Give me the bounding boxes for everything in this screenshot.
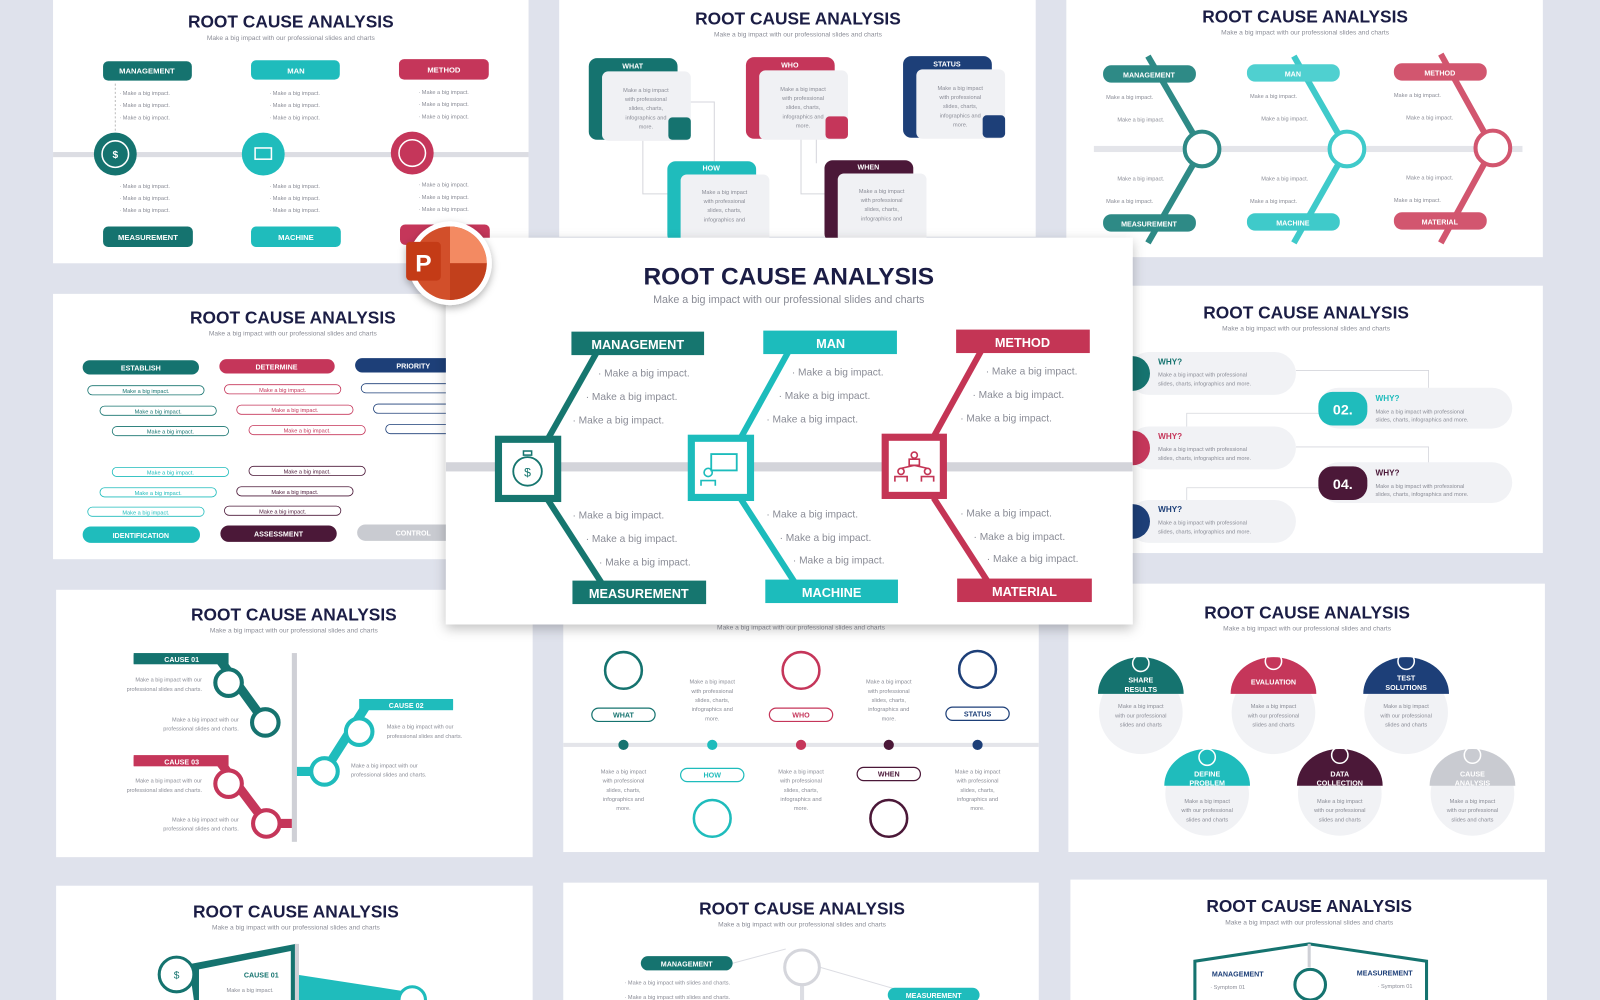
branch: management / measurement: · Make a big impact. <box>586 534 677 545</box>
slide: row4 col3 <box>1070 880 1547 1000</box>
slide: row1 col3 chevrons: Make a big impact. <box>1106 95 1154 101</box>
slide: row3 col3 process domes: slides and charts <box>1319 817 1361 823</box>
main title: ROOT CAUSE ANALYSIS <box>644 264 934 291</box>
slide: row2 col1 establish/determine: Make a big impact. <box>271 408 319 414</box>
slide: row3 col3 process domes: ROOT CAUSE ANALYSIS <box>1204 602 1410 622</box>
branch: man / machine: · Make a big impact. <box>766 509 858 520</box>
slide: row2 col1 establish/determine: Make a big impact. <box>135 409 182 415</box>
slide: row1 col3 chevrons: MANAGEMENT <box>1123 72 1176 80</box>
column: man: · Make a big impact. <box>269 196 320 202</box>
slide: row2 col1 establish/determine <box>53 294 529 559</box>
branch: management / measurement: · Make a big impact. <box>598 369 690 380</box>
column: method: · Make a big impact. <box>418 183 469 189</box>
card: how: slides, charts, <box>707 208 742 214</box>
slide: row2 col3 why: WHY? <box>1158 432 1182 441</box>
slide: row2 col1 establish/determine: Make a big impact with our professional slides and charts <box>209 331 377 338</box>
card: what: Make a big impact <box>623 88 669 94</box>
main subtitle: Make a big impact with our professional slides and charts <box>653 294 924 306</box>
slide: row1 col3 chevrons: Make a big impact. <box>1117 117 1165 123</box>
branch: management / measurement: · Make a big impact. <box>572 510 664 521</box>
slide: row4 col1 <box>56 886 533 1000</box>
card: how: HOW <box>703 164 720 172</box>
slide: row3 col3 process domes: with our professional <box>1313 808 1366 814</box>
slide: row3 col2 what/how timeline: infographics and <box>780 797 822 803</box>
slide: row3 col3 process domes: slides and charts <box>1252 723 1295 729</box>
slide: row2 col3 why: 02. <box>1333 402 1353 418</box>
column: management: · Make a big impact. <box>119 103 170 109</box>
card: what: slides, charts, <box>629 106 664 112</box>
slide: row4 col2: Make a big impact with our professional slides and charts <box>718 922 887 929</box>
column: management: · Make a big impact. <box>119 208 170 214</box>
slide: row1 col3 chevrons: Make a big impact. <box>1261 177 1309 183</box>
slide: row3 col3 process domes <box>1068 584 1545 852</box>
slide: row3 col1 causes staircase: Make a big impact with our <box>135 779 202 785</box>
slide: row2 col1 establish/determine: DETERMINE <box>256 363 298 371</box>
slide: row4 col2: · Make a big impact with slides and charts. <box>624 981 731 987</box>
card: status: with professional <box>938 95 981 101</box>
branch: method / material: · Make a big impact. <box>960 413 1052 424</box>
slide: row3 col1 causes staircase: professional slides and charts. <box>387 734 463 740</box>
slide: row3 col1 causes staircase: professional slides and charts. <box>351 773 427 779</box>
slide: row3 col1 causes staircase: professional slides and charts. <box>163 827 239 833</box>
slide: row1 col3 chevrons: METHOD <box>1424 70 1455 78</box>
card: who: with professional <box>781 96 824 102</box>
slide: row3 col2 what/how timeline: Make a big impact <box>601 769 647 775</box>
slide: row3 col3 process domes: with our professional <box>1247 713 1299 719</box>
slide: row2 col1 establish/determine: Make a big impact. <box>122 510 170 516</box>
card: when: Make a big impact <box>859 189 905 195</box>
slide: row3 col1 causes staircase: Make a big impact with our professional slides and charts <box>210 628 379 635</box>
slide: row2 col1 establish/determine: ASSESSMENT <box>254 531 304 539</box>
card: who <box>746 57 848 140</box>
branch: man / machine: · Make a big impact. <box>793 555 885 566</box>
branch: man / machine <box>688 331 898 603</box>
card: how: Make a big impact <box>702 190 748 196</box>
slide: row3 col3 process domes: TEST <box>1397 675 1416 683</box>
slide: row2 col3 why: Make a big impact with professional <box>1376 484 1464 490</box>
slide: row3 col3 process domes: Make a big impact <box>1118 704 1164 710</box>
slide: row1 col2 what/who cards: ROOT CAUSE ANALYSIS <box>695 8 901 28</box>
slide: row2 col1 establish/determine: Make a big impact. <box>147 430 194 436</box>
slide: row1 col3 chevrons: Make a big impact. <box>1117 177 1165 183</box>
slide: row3 col3 process domes: with our professional <box>1114 713 1167 719</box>
card: what: more. <box>639 125 654 131</box>
branch: man / machine: · Make a big impact. <box>780 533 871 544</box>
slide: row3 col3 process domes: ANALYSIS <box>1455 780 1490 788</box>
column: method: · Make a big impact. <box>418 207 469 213</box>
slide: row3 col2 what/how timeline: Make a big impact with our professional slides and charts <box>717 625 886 632</box>
branch: method / material <box>882 330 1092 602</box>
slide: row4 col2: MEASUREMENT <box>906 992 962 1000</box>
slide: row3 col2 what/how timeline: slides, charts, <box>872 698 906 704</box>
slide: row3 col2 what/how timeline: more. <box>616 806 631 812</box>
slide: row1 col3 chevrons: Make a big impact with our professional slides and charts <box>1221 30 1390 37</box>
slide: row3 col1 causes staircase: professional slides and charts. <box>127 687 202 693</box>
card: status: infographics and <box>940 113 981 119</box>
slide: row3 col2 what/how timeline: slides, charts, <box>606 788 641 794</box>
slide: row2 col3 why <box>1066 286 1543 553</box>
slide: row3 col3 process domes: Make a big impact <box>1251 704 1297 710</box>
slide: row3 col2 what/how timeline: Make a big impact <box>955 769 1001 775</box>
slide: row3 col3 process domes: with our professional <box>1180 808 1233 814</box>
branch: method / material: MATERIAL <box>992 584 1057 599</box>
slide: row2 col3 why: slides, charts, infographics and more. <box>1158 456 1252 462</box>
slide: row4 col1: Make a big impact with our professional slides and charts <box>212 925 381 932</box>
card: how: infographics and <box>704 217 745 223</box>
column: method: · Make a big impact. <box>418 90 469 96</box>
slide: row4 col2: MANAGEMENT <box>661 960 713 968</box>
slide: row3 col2 what/how timeline: with professional <box>956 779 998 785</box>
slide: row2 col3 why: Make a big impact with our professional slides and charts <box>1222 326 1391 333</box>
slide: row2 col1 establish/determine: Make a big impact. <box>147 470 194 476</box>
column: management: · Make a big impact. <box>119 196 170 202</box>
card: what <box>589 58 691 141</box>
slide: row2 col3 why: slides, charts, infographics and more. <box>1376 492 1469 498</box>
column: method: METHOD <box>427 65 461 74</box>
column: method: · Make a big impact. <box>418 114 469 120</box>
slide: row3 col2 what/how timeline: WHEN <box>878 771 900 779</box>
card: how <box>667 161 769 244</box>
slide: row3 col1 causes staircase: professional slides and charts. <box>163 727 239 733</box>
branch: man / machine: · Make a big impact. <box>766 414 858 425</box>
card: when: with professional <box>860 198 903 204</box>
slide: row2 col3 why: Make a big impact with professional <box>1376 409 1464 415</box>
slide: row2 col1 establish/determine: Make a big impact. <box>284 429 331 435</box>
icon: powerpoint logo <box>406 221 492 305</box>
slide: row3 col3 process domes: slides and charts <box>1385 723 1427 729</box>
slide: row2 col1 establish/determine: Make a big impact. <box>271 490 319 496</box>
card: when: infographics and <box>861 216 902 222</box>
main slide: root cause analysis fishbone <box>446 238 1133 624</box>
slide: row2 col1 establish/determine: IDENTIFICATION <box>113 532 169 540</box>
slide: row3 col2 what/how timeline: slides, charts, <box>695 698 730 704</box>
branch: management / measurement: · Make a big impact. <box>572 415 664 426</box>
branch: man / machine: MACHINE <box>802 585 861 600</box>
slide: row3 col3 process domes: slides and charts <box>1120 723 1162 729</box>
column: method <box>391 59 490 245</box>
slide: row1 col3 chevrons: Make a big impact. <box>1106 199 1154 205</box>
column: man: · Make a big impact. <box>269 103 320 109</box>
slide: row1 col3 chevrons: MAN <box>1285 71 1301 79</box>
slide: row2 col3 why: WHY? <box>1376 469 1400 478</box>
slide: row2 col1 establish/determine: Make a big impact. <box>122 389 170 395</box>
branch: management / measurement: $ <box>524 466 531 480</box>
slide: row3 col2 what/how timeline: infographics and <box>692 707 733 713</box>
slide: row2 col3 why: Make a big impact with professional <box>1158 447 1247 453</box>
slide: row4 col2 <box>563 883 1039 1000</box>
slide: row3 col1 causes staircase: Make a big impact with our <box>135 678 202 684</box>
slide: row2 col1 establish/determine: ESTABLISH <box>121 364 161 372</box>
column: management <box>94 61 193 247</box>
slide: row2 col3 why: WHY? <box>1158 357 1182 366</box>
slide: row3 col1 causes staircase: Make a big impact with our <box>172 717 239 723</box>
slide: row1 col3 chevrons: Make a big impact. <box>1250 199 1298 205</box>
slide: row2 col3 why: slides, charts, infographics and more. <box>1158 530 1252 536</box>
slide: row3 col3 process domes: Make a big impact <box>1450 799 1496 805</box>
slide: row2 col3 why: slides, charts, infographics and more. <box>1376 417 1469 423</box>
card: what: with professional <box>624 97 667 103</box>
column: man <box>242 60 341 247</box>
slide: row3 col2 what/how timeline: with professional <box>690 689 733 695</box>
slide: row4 col3: Make a big impact with our professional slides and charts <box>1225 919 1394 926</box>
slide: row3 col2 what/how timeline: STATUS <box>964 710 992 718</box>
slide: row1 col1 fishbone circles <box>53 0 529 263</box>
card: status: more. <box>953 123 968 129</box>
card: who: WHO <box>781 61 799 69</box>
slide: row1 col3 chevrons: Make a big impact. <box>1406 176 1454 182</box>
slide: row1 col3 chevrons: ROOT CAUSE ANALYSIS <box>1202 6 1408 26</box>
branch: method / material: · Make a big impact. <box>973 532 1065 543</box>
branch: man / machine: · Make a big impact. <box>779 391 870 402</box>
slide: row1 col3 chevrons <box>1066 0 1543 257</box>
branch: management / measurement: MEASUREMENT <box>589 586 689 601</box>
slide: row3 col3 process domes: Make a big impact <box>1184 799 1230 805</box>
slide: row1 col1 fishbone circles: Make a big impact with our professional slides and charts <box>207 35 375 42</box>
column: management: · Make a big impact. <box>119 91 170 97</box>
slide: row2 col1 establish/determine: CONTROL <box>396 530 432 538</box>
slide: row3 col2 what/how timeline: slides, charts, <box>960 788 995 794</box>
branch: management / measurement: MANAGEMENT <box>591 337 684 352</box>
card: when: slides, charts, <box>864 207 899 213</box>
slide: row2 col3 why: 04. <box>1333 477 1353 493</box>
slide: row1 col3 chevrons: Make a big impact. <box>1261 116 1309 122</box>
slide: row2 col3 why: Make a big impact with professional <box>1158 520 1247 526</box>
slide: row3 col1 causes staircase: CAUSE 01 <box>164 656 199 664</box>
branch: management / measurement: · Make a big impact. <box>599 557 691 568</box>
slide: row3 col2 what/how timeline: more. <box>970 806 985 812</box>
slide: row3 col3 process domes: Make a big impact <box>1383 704 1429 710</box>
slide: row3 col3 process domes: COLLECTION <box>1317 780 1363 788</box>
slide: row3 col2 what/how timeline: infographics and <box>603 797 644 803</box>
branch: man / machine: MAN <box>816 336 845 351</box>
slide: row1 col3 chevrons: MACHINE <box>1276 220 1310 228</box>
slide: row4 col3: MANAGEMENT <box>1212 971 1264 979</box>
slide: row3 col3 process domes: with our professional <box>1379 713 1432 719</box>
slide: row3 col2 what/how timeline: HOW <box>704 772 721 780</box>
slide: row3 col3 process domes: Make a big impact <box>1317 799 1363 805</box>
slide: row2 col1 establish/determine: PRIORITY <box>396 362 430 370</box>
slide: row3 col3 process domes: with our professional <box>1446 808 1498 814</box>
slide: row4 col3: · Symptom 01 <box>1378 984 1412 990</box>
card: what: WHAT <box>622 62 644 70</box>
branch: man / machine: · Make a big impact. <box>792 368 884 379</box>
slide: row3 col3 process domes: RESULTS <box>1124 686 1157 694</box>
slide: row3 col1 causes staircase: CAUSE 02 <box>389 702 424 710</box>
branch: management / measurement: · Make a big impact. <box>586 392 677 403</box>
slide: row3 col1 causes staircase: ROOT CAUSE ANALYSIS <box>191 604 397 624</box>
card: who: slides, charts, <box>786 105 821 111</box>
slide: row3 col3 process domes: CAUSE <box>1460 771 1485 779</box>
slide: row1 col3 chevrons: MEASUREMENT <box>1121 221 1178 229</box>
slide: row3 col2 what/how timeline <box>563 617 1039 852</box>
column: man: MACHINE <box>278 233 314 242</box>
card: who: infographics and <box>782 114 824 120</box>
slide: row3 col3 process domes: slides and charts <box>1451 817 1494 823</box>
slide: row3 col1 causes staircase: Make a big impact with our <box>387 725 454 731</box>
slide: row2 col3 why: WHY? <box>1376 394 1400 403</box>
branch: method / material: · Make a big impact. <box>960 508 1052 519</box>
slide: row3 col2 what/how timeline: with professional <box>602 779 644 785</box>
slide: row4 col3: ROOT CAUSE ANALYSIS <box>1206 896 1412 916</box>
slide: row2 col1 establish/determine: Make a big impact. <box>259 509 307 515</box>
slide: row3 col2 what/how timeline: more. <box>705 716 720 722</box>
icon: powerpoint logo: P <box>415 250 432 277</box>
slide: row3 col3 process domes: SOLUTIONS <box>1385 684 1427 692</box>
slide: row2 col1 establish/determine: Make a big impact. <box>135 491 182 497</box>
column: method: · Make a big impact. <box>418 195 469 201</box>
slide: row3 col1 causes staircase: Make a big impact with our <box>172 817 239 823</box>
slide: row4 col1: Make a big impact. <box>227 988 274 994</box>
slide: row2 col1 establish/determine: Make a big impact. <box>259 388 307 394</box>
slide: row1 col2 what/who cards <box>559 0 1036 244</box>
slide: row3 col3 process domes: DEFINE <box>1194 771 1220 779</box>
card: who: Make a big impact <box>780 87 826 93</box>
slide: row3 col2 what/how timeline: WHAT <box>613 711 635 719</box>
branch: method / material: · Make a big impact. <box>987 554 1078 565</box>
slide: row4 col3: MEASUREMENT <box>1357 970 1413 978</box>
slide: row1 col3 chevrons: Make a big impact. <box>1394 93 1441 99</box>
card: who: more. <box>796 124 811 130</box>
slide: row3 col3 process domes: SHARE <box>1128 677 1154 685</box>
column: management: · Make a big impact. <box>119 115 170 121</box>
slide: row3 col2 what/how timeline: WHO <box>792 711 810 719</box>
column: management: MANAGEMENT <box>119 66 175 75</box>
column: method: · Make a big impact. <box>418 102 469 108</box>
card: status: Make a big impact <box>937 86 983 92</box>
card: what: infographics and <box>625 115 667 121</box>
column: man: · Make a big impact. <box>269 208 320 214</box>
slide: row3 col1 causes staircase: CAUSE 03 <box>164 758 199 766</box>
slide: row4 col1: $ <box>174 971 180 982</box>
slide: row3 col3 process domes: slides and charts <box>1186 817 1228 823</box>
branch: method / material: · Make a big impact. <box>972 390 1064 401</box>
slide: row1 col3 chevrons: Make a big impact. <box>1406 115 1454 121</box>
column: man: · Make a big impact. <box>269 91 320 97</box>
card: status: STATUS <box>933 60 961 68</box>
card: status: slides, charts, <box>943 104 978 110</box>
column: man: · Make a big impact. <box>269 115 320 121</box>
column: management: · Make a big impact. <box>119 184 170 190</box>
slide: row2 col3 why: WHY? <box>1158 505 1182 514</box>
card: when: WHEN <box>857 163 879 171</box>
slide: row3 col2 what/how timeline: Make a big impact <box>778 769 824 775</box>
slide: row4 col3: · Symptom 01 <box>1210 985 1245 991</box>
slide: row3 col2 what/how timeline: Make a big impact <box>689 680 735 686</box>
slide: row2 col3 why: ROOT CAUSE ANALYSIS <box>1203 302 1409 322</box>
card: how: with professional <box>703 199 745 205</box>
slide: row3 col3 process domes: Make a big impact with our professional slides and charts <box>1223 626 1392 633</box>
slide: row2 col1 establish/determine: ROOT CAUSE ANALYSIS <box>190 307 396 327</box>
slide: row3 col2 what/how timeline: with professional <box>867 689 910 695</box>
slide: row3 col1 causes staircase: professional slides and charts. <box>127 788 202 794</box>
slide: row3 col2 what/how timeline: infographics and <box>868 707 909 713</box>
slide: row3 col3 process domes: DATA <box>1330 771 1349 779</box>
slide: row4 col1: ROOT CAUSE ANALYSIS <box>193 901 399 921</box>
slide: row3 col2 what/how timeline: infographics and <box>957 797 998 803</box>
slide: row3 col1 causes staircase: Make a big impact with our <box>351 763 418 769</box>
branch: method / material: · Make a big impact. <box>986 366 1077 377</box>
slide: row1 col3 chevrons: MATERIAL <box>1422 218 1459 226</box>
branch: method / material: METHOD <box>995 335 1050 350</box>
card: status <box>903 56 1005 139</box>
slide: row4 col2: ROOT CAUSE ANALYSIS <box>699 898 905 918</box>
slide: row3 col2 what/how timeline: slides, charts, <box>784 788 819 794</box>
slide: row4 col1: CAUSE 01 <box>244 972 279 980</box>
slide: row2 col3 why: slides, charts, infographics and more. <box>1158 382 1252 388</box>
column: man: · Make a big impact. <box>269 184 320 190</box>
column: management: MEASUREMENT <box>118 233 178 242</box>
slide: row2 col3 why: Make a big impact with professional <box>1158 373 1247 379</box>
slide: row1 col3 chevrons: Make a big impact. <box>1394 198 1441 204</box>
card: when <box>824 160 927 243</box>
slide: row1 col3 chevrons: Make a big impact. <box>1250 94 1298 100</box>
slide: row3 col2 what/how timeline: more. <box>882 716 896 722</box>
column: man: MAN <box>287 66 305 75</box>
branch: management / measurement <box>495 332 706 604</box>
slide: row3 col3 process domes: PROBLEM <box>1189 780 1225 788</box>
title: ROOT CAUSE ANALYSIS <box>188 12 394 32</box>
slide: row1 col2 what/who cards: Make a big impact with our professional slides and charts <box>714 32 883 39</box>
column: management: $ <box>112 150 118 161</box>
slide: row3 col3 process domes: EVALUATION <box>1251 679 1296 687</box>
slide: row3 col2 what/how timeline: with professional <box>779 779 822 785</box>
slide: row2 col1 establish/determine: Make a big impact. <box>284 469 331 475</box>
slide: row3 col2 what/how timeline: more. <box>794 806 809 812</box>
slide: row3 col1 causes staircase <box>56 590 533 857</box>
slide: row3 col2 what/how timeline: Make a big impact <box>866 680 912 686</box>
